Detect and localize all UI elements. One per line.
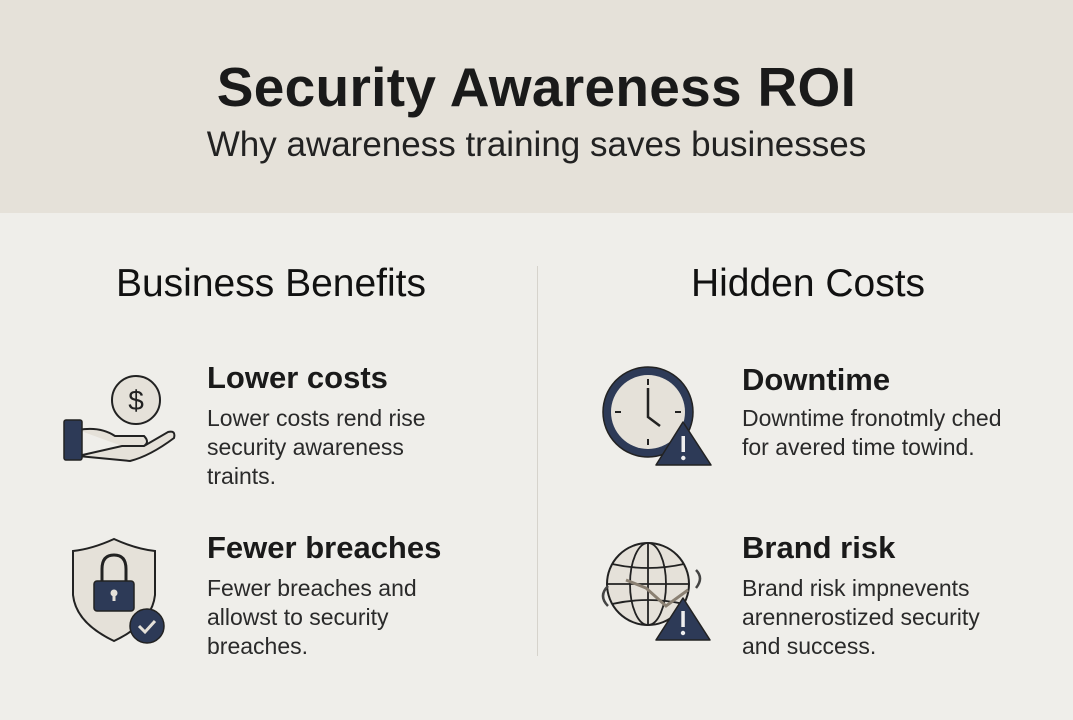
- heading: business benefits: Business Benefits: [116, 262, 426, 305]
- icon: shield with lock: [72, 538, 165, 644]
- text block: downtime: [742, 362, 1002, 460]
- text block: fewer breaches: allowst to security: [207, 604, 389, 630]
- text block: downtime: for avered time towind.: [742, 434, 975, 460]
- icon: hand with coin: [63, 375, 176, 462]
- text block: lower costs: security awareness: [207, 434, 404, 460]
- subtitle: Why awareness training saves businesses: [207, 125, 866, 164]
- text block: fewer breaches: breaches.: [207, 633, 308, 659]
- text block: brand risk: [742, 530, 980, 659]
- text block: lower costs: Lower costs: [207, 360, 388, 395]
- text block: fewer breaches: Fewer breaches and: [207, 575, 417, 601]
- icon: clock with warning: [602, 366, 712, 466]
- text block: fewer breaches: [207, 530, 441, 659]
- icon: globe with warning: [602, 542, 711, 641]
- text block: brand risk: and success.: [742, 633, 876, 659]
- text block: brand risk: Brand risk: [742, 530, 895, 565]
- text block: lower costs: [207, 360, 426, 489]
- text block: lower costs: Lower costs rend rise: [207, 405, 426, 431]
- text block: downtime: Downtime fronotmly ched: [742, 405, 1002, 431]
- icon: hand with coin: $: [128, 385, 144, 416]
- text block: lower costs: traints.: [207, 463, 276, 489]
- text block: brand risk: arennerostized security: [742, 604, 980, 630]
- text block: brand risk: Brand risk impnevents: [742, 575, 970, 601]
- heading: hidden costs: Hidden Costs: [691, 262, 925, 305]
- text block: downtime: Downtime: [742, 362, 890, 397]
- text block: fewer breaches: Fewer breaches: [207, 530, 441, 565]
- title: Security Awareness ROI: [217, 56, 856, 118]
- header band: [0, 0, 1073, 213]
